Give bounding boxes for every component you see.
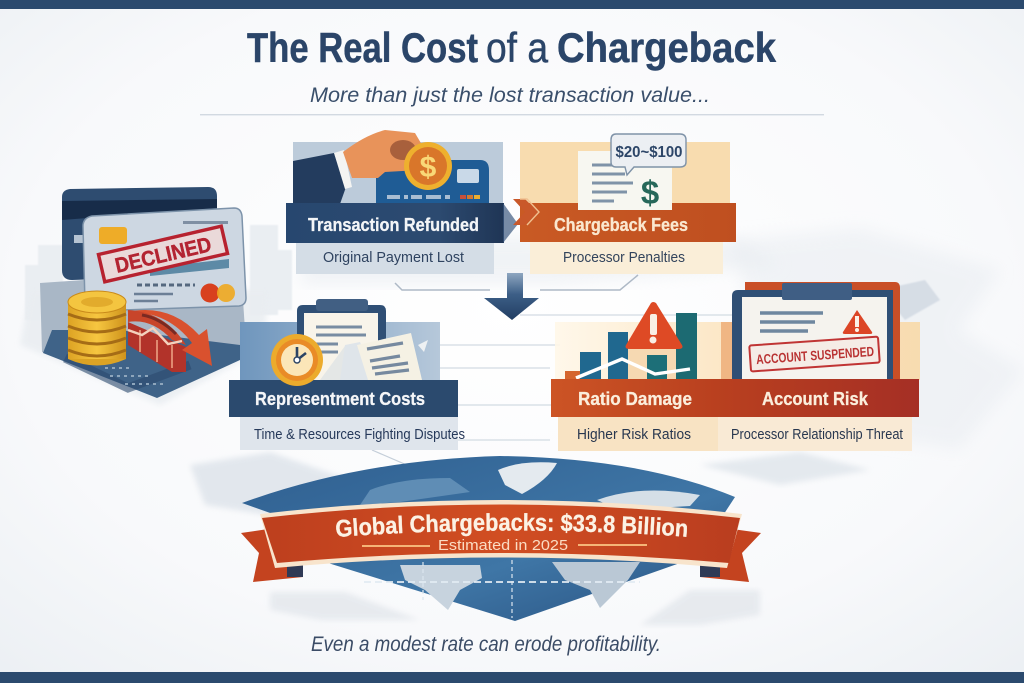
back card (62, 187, 217, 280)
panel: transaction refunded (286, 130, 504, 274)
heading: Chargeback Fees (554, 215, 688, 235)
warning triangle (626, 302, 682, 349)
title: The Real Cost (247, 24, 478, 71)
illustration background (520, 142, 730, 204)
hand and sleeve (293, 130, 425, 204)
sub-headline: Estimated in 2025 (438, 537, 568, 554)
caption box (240, 417, 458, 450)
caption: Original Payment Lost (323, 250, 464, 266)
panel: ratio damage and account risk (551, 282, 920, 451)
headline: Global Chargebacks: $33.8 Billion (336, 513, 687, 537)
peach background (555, 322, 920, 380)
account suspended stamp: ACCOUNT SUSPENDED (756, 344, 875, 367)
clock icon (271, 334, 323, 386)
illustration background (240, 322, 440, 382)
falling chart and red arrow (127, 310, 212, 372)
panel: chargeback fees (520, 134, 736, 274)
caption: Processor Penalties (563, 250, 685, 266)
invoice document (578, 151, 672, 211)
account risk caption: Processor Relationship Threat (731, 427, 903, 443)
clipboard: account suspended (732, 282, 900, 380)
caption box (296, 243, 494, 274)
ratio damage heading: Ratio Damage (578, 389, 692, 409)
gold coin stack (68, 291, 126, 366)
arrow: chevron to fees (503, 199, 539, 243)
caption box (530, 242, 723, 274)
invoice document: $ (641, 174, 659, 211)
closing tagline: Even a modest rate can erode profitability. (311, 633, 661, 656)
blue credit card (376, 160, 489, 204)
faint skyline under the globe (270, 590, 760, 625)
platform base (20, 280, 270, 405)
panel: representment costs (229, 299, 465, 450)
ratio damage caption: Higher Risk Ratios (577, 427, 691, 443)
clipboard with lines (297, 299, 386, 380)
heading band (551, 379, 919, 417)
heading: Representment Costs (255, 389, 425, 409)
heading band (229, 380, 458, 417)
ribbon banner (241, 500, 761, 582)
illustration background (293, 142, 503, 204)
price speech bubble (611, 134, 686, 175)
declined stamp: DECLINED (113, 233, 214, 278)
title: of a (486, 24, 549, 71)
account risk heading: Account Risk (762, 389, 869, 409)
ribbon headline baseline curve (336, 530, 690, 537)
top border bar (0, 0, 1024, 9)
price speech bubble: $20~$100 (616, 144, 682, 161)
gold dollar coin (404, 142, 452, 190)
title: Chargeback (557, 24, 777, 71)
heading band (520, 203, 736, 242)
ribbon tails (241, 528, 761, 582)
illustration: declined card and falling coins (20, 187, 270, 405)
arrow: down to second row (484, 273, 539, 320)
bar chart (565, 313, 733, 380)
heading band (286, 203, 504, 243)
world map globe (242, 456, 735, 621)
subtitle: More than just the lost transaction value... (310, 84, 710, 107)
subtitle divider (200, 114, 824, 115)
paper documents (320, 333, 428, 380)
front card (83, 208, 246, 311)
caption: Time & Resources Fighting Disputes (254, 427, 465, 443)
ribbon body (262, 504, 740, 563)
decorative rules (362, 545, 647, 546)
caption boxes (558, 417, 912, 451)
ribbon cream edge (260, 500, 742, 568)
heading: Transaction Refunded (308, 215, 479, 235)
gold dollar coin: $ (420, 151, 437, 184)
account suspended stamp (749, 337, 880, 372)
bottom border bar (0, 672, 1024, 683)
